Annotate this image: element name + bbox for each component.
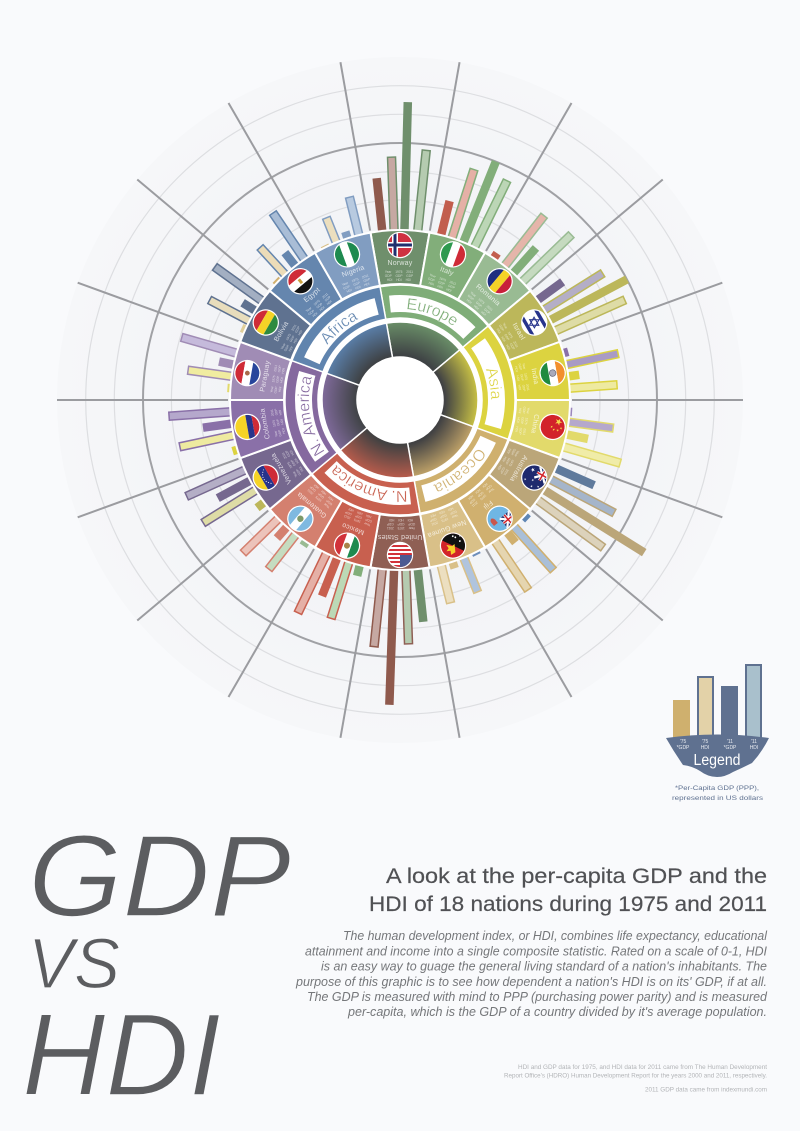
region: Asia: Asia xyxy=(486,369,502,400)
bars: Colombia xyxy=(169,408,241,455)
segment: Mexico: GDP GDP GDP xyxy=(345,510,373,524)
bars: Romania xyxy=(489,213,574,286)
description text: purpose of this graphic is to see how dependent a nation's HDI is on its' GDP, if at all. xyxy=(295,975,767,989)
country: Australia xyxy=(484,432,646,556)
segment: Romania: Romania xyxy=(474,283,501,308)
description text: per-capita, which is the GDP of a country divided by it's average population. xyxy=(347,1005,767,1019)
source notes: 2011 GDP data came from indexmundi.com xyxy=(645,1086,767,1094)
segment: Norway: GDP GDP GDP xyxy=(385,274,413,278)
region: Asia xyxy=(433,326,514,438)
legend: Legend xyxy=(694,752,740,769)
segment: United States: HDI HDI HDI xyxy=(389,518,413,522)
segment: Venezuela: HDI HDI HDI xyxy=(289,449,304,472)
country: New Guinea xyxy=(421,500,486,605)
bars: Guatemala xyxy=(240,514,311,572)
segment: Bolivia: HDI HDI HDI xyxy=(288,329,303,352)
flag: New Guinea xyxy=(441,534,465,558)
region: Europe: Europe xyxy=(407,298,457,325)
region: N. America (purple) xyxy=(286,362,367,474)
segment: Israel: Year 1975 2011 xyxy=(502,322,519,349)
country: Nigeria xyxy=(314,196,389,303)
segment: Mexico: HDI HDI HDI xyxy=(348,507,372,519)
bars: Egypt xyxy=(257,211,309,286)
flag: Paraguay xyxy=(233,359,261,387)
segment: Guatemala: GDP GDP GDP xyxy=(309,485,333,506)
segment: Norway: Norway xyxy=(388,260,413,267)
description text xyxy=(295,929,768,1019)
country: United States xyxy=(370,514,430,705)
segment: Fiji: Year 1975 2011 xyxy=(471,487,495,508)
segment: India xyxy=(510,341,571,399)
segment: Paraguay xyxy=(227,341,293,409)
flag: Italy xyxy=(441,242,465,266)
segment: Mexico: Mexico xyxy=(341,521,365,536)
bars: Mexico xyxy=(294,550,364,620)
segment: Mexico: Year 1975 2011 xyxy=(343,514,371,527)
description text: attainment and income into a single composite statistic. Rated on a scale of 0-1, HDI xyxy=(305,944,767,958)
segment: Colombia xyxy=(227,391,293,459)
flag: United States xyxy=(388,543,412,567)
source notes: HDI and GDP data for 1975, and HDI data for 2011 came from The Human Development xyxy=(518,1064,767,1071)
legend xyxy=(666,665,769,802)
subtitle: HDI of 18 nations during 1975 and 2011 xyxy=(369,893,767,916)
flag: India xyxy=(540,361,565,385)
flag: Bolivia xyxy=(249,306,282,339)
segment: Bolivia: GDP GDP GDP xyxy=(283,326,301,352)
description text: The human development index, or HDI, combines life expectancy, educational xyxy=(343,929,768,943)
segment: Egypt: GDP GDP GDP xyxy=(307,295,332,316)
country: Paraguay xyxy=(181,334,293,409)
country: Venezuela xyxy=(184,440,311,528)
segment: Paraguay: GDP GDP GDP xyxy=(273,365,282,394)
legend: represented in US dollars xyxy=(672,795,764,802)
segment: Nigeria: GDP GDP GDP xyxy=(343,277,371,291)
segment: United States: GDP GDP GDP xyxy=(387,522,415,526)
segment: Paraguay: Year 1975 2011 xyxy=(269,364,278,393)
segment: Israel: HDI HDI HDI xyxy=(496,328,511,351)
segment: Nigeria xyxy=(314,230,389,303)
region: Africa xyxy=(292,287,394,386)
country: India xyxy=(510,341,620,399)
legend: '75 xyxy=(702,739,708,745)
segment: Egypt: Year 1975 2011 xyxy=(305,292,329,313)
subtitle xyxy=(369,865,767,916)
segment: Guatemala: Year 1975 2011 xyxy=(306,488,331,509)
segment: United States xyxy=(370,514,430,570)
segment: New Guinea: New Guinea xyxy=(426,518,467,538)
segment: Romania xyxy=(458,252,530,324)
country: Italy xyxy=(411,160,511,303)
segment: Australia: HDI HDI HDI xyxy=(497,448,512,471)
legend: *Per-Capita GDP (PPP), xyxy=(675,785,759,792)
region: N. America (purple): N. America xyxy=(298,376,324,456)
segment: Colombia: HDI HDI HDI xyxy=(278,409,286,434)
bars: New Guinea xyxy=(437,549,481,604)
segment: Guatemala: HDI HDI HDI xyxy=(313,483,334,502)
segment: Australia: Australia xyxy=(508,454,529,483)
segment: China: China xyxy=(529,414,540,434)
segment: China: GDP GDP GDP xyxy=(518,406,527,435)
segment: Australia: GDP GDP GDP xyxy=(499,448,517,474)
description text: is an easy way to guage the general living standard of a nation's inhabitants. The xyxy=(321,960,767,974)
bars: Venezuela xyxy=(185,465,268,526)
main title: GDP xyxy=(28,811,291,941)
region: Africa: Africa xyxy=(322,313,358,344)
legend: '11 xyxy=(751,739,757,745)
segment: Paraguay: Paraguay xyxy=(259,360,272,392)
segment: China: Year 1975 2011 xyxy=(522,407,531,436)
region: N. America (red): N. America xyxy=(332,465,406,502)
country: China xyxy=(510,401,622,468)
region: Europe xyxy=(381,286,487,372)
segment: China: HDI HDI HDI xyxy=(514,408,522,432)
segment: Venezuela: Year 1975 2011 xyxy=(281,451,298,478)
segment: Romania: HDI HDI HDI xyxy=(466,298,487,317)
main title: HDI xyxy=(22,989,221,1120)
segment: Italy: HDI HDI HDI xyxy=(428,281,452,293)
segment: Guatemala: Guatemala xyxy=(296,490,328,519)
legend: HDI xyxy=(701,745,709,751)
white hub backing xyxy=(284,284,516,516)
legend: '75 xyxy=(680,739,686,745)
segment: Paraguay: HDI HDI HDI xyxy=(278,368,286,392)
country: Egypt xyxy=(257,211,349,331)
segment: Norway: Year 1975 2011 xyxy=(385,270,413,274)
segment: Bolivia xyxy=(238,289,316,368)
segment: Egypt: HDI HDI HDI xyxy=(312,299,333,318)
country: Colombia xyxy=(168,401,290,459)
segment: Italy: GDP GDP GDP xyxy=(427,276,455,290)
segment: Israel: GDP GDP GDP xyxy=(498,324,516,350)
segment: United States: Year 1975 2011 xyxy=(387,526,415,530)
bars: Australia xyxy=(534,464,646,556)
source notes xyxy=(504,1064,767,1094)
segment: New Guinea: Year 1975 2011 xyxy=(431,513,459,527)
segment: Italy xyxy=(419,232,484,299)
bars: United States xyxy=(370,567,428,705)
bars: Israel xyxy=(533,270,629,335)
country: Guatemala xyxy=(240,476,342,573)
flag: Colombia xyxy=(233,413,261,441)
flag: China xyxy=(540,414,565,439)
segment: Nigeria: Nigeria xyxy=(341,264,366,279)
flag: Guatemala xyxy=(288,506,312,531)
description text: The GDP is measured with mind to PPP (purchasing power parity) and is measured xyxy=(307,990,768,1004)
segment: Israel xyxy=(489,290,560,359)
main title xyxy=(22,811,291,1120)
flag: Australia xyxy=(522,466,546,490)
flag: Mexico xyxy=(335,534,359,558)
region: Oceania: Oceania xyxy=(433,450,485,492)
flag: Egypt xyxy=(283,264,317,298)
segment: Venezuela xyxy=(240,440,311,510)
segment: India: Year 1975 2011 xyxy=(521,363,530,391)
source notes: Report Office's (HDRO) Human Development Report for the years 2000 and 2011, respectively. xyxy=(504,1072,767,1080)
segment: China xyxy=(510,401,571,458)
segment: Romania: Year 1975 2011 xyxy=(469,291,494,312)
segment: Egypt: Egypt xyxy=(303,287,322,304)
segment: Nigeria: Year 1975 2011 xyxy=(341,273,369,287)
bars: China xyxy=(560,407,621,467)
segment: India: India xyxy=(530,368,539,385)
flag: Romania xyxy=(488,269,512,294)
bars: Bolivia xyxy=(208,264,266,334)
segment: Colombia: Colombia xyxy=(259,408,272,440)
segment: Colombia: Year 1975 2011 xyxy=(270,409,279,437)
segment: Norway xyxy=(370,230,430,286)
segment: Fiji xyxy=(459,474,530,548)
bars: Italy xyxy=(437,160,511,251)
segment: Fiji: HDI HDI HDI xyxy=(467,482,488,501)
segment: New Guinea: GDP GDP GDP xyxy=(429,509,457,523)
segment: Colombia: GDP GDP GDP xyxy=(274,408,282,437)
segment: New Guinea: HDI HDI HDI xyxy=(430,506,454,518)
flag: Norway xyxy=(388,233,412,257)
segment: Bolivia: Bolivia xyxy=(273,320,290,343)
center hole xyxy=(357,357,443,443)
bars: Paraguay xyxy=(181,334,240,393)
segment: Egypt xyxy=(268,251,349,331)
region: Oceania xyxy=(408,414,508,512)
segment: Venezuela: Venezuela xyxy=(270,452,293,485)
segment: Guatemala xyxy=(270,476,342,548)
legend: *GDP xyxy=(677,745,690,751)
subtitle: A look at the per-capita GDP and the xyxy=(386,865,767,888)
segment: Australia xyxy=(490,439,560,509)
flag: Israel xyxy=(522,310,546,334)
segment: Italy: Italy xyxy=(439,266,455,277)
legend: '11 xyxy=(727,739,733,745)
bars: Nigeria xyxy=(321,196,363,251)
segment: Bolivia: Year 1975 2011 xyxy=(280,323,298,350)
country: Norway xyxy=(370,102,430,286)
bars: India xyxy=(560,348,619,392)
country: Mexico xyxy=(294,497,389,620)
segment: Israel: Israel xyxy=(511,322,526,342)
legend: *GDP xyxy=(724,745,737,751)
country: Bolivia xyxy=(208,264,316,368)
segment: Norway: HDI HDI HDI xyxy=(387,278,411,282)
segment: United States: United States xyxy=(377,533,422,540)
segment: Fiji: Fiji xyxy=(482,499,494,511)
segment: Venezuela: GDP GDP GDP xyxy=(284,450,302,476)
segment: Italy: Year 1975 2011 xyxy=(429,273,457,286)
segment: New Guinea xyxy=(421,500,486,568)
flag: Fiji xyxy=(488,506,512,531)
radial grid xyxy=(57,57,743,743)
bars: Norway xyxy=(372,102,430,233)
segment: Mexico xyxy=(316,501,381,568)
segment: Nigeria: HDI HDI HDI xyxy=(346,282,370,294)
segment: Fiji: GDP GDP GDP xyxy=(468,484,493,505)
country: Israel xyxy=(489,268,629,359)
segment: India: GDP GDP GDP xyxy=(518,363,526,392)
country: Fiji xyxy=(451,469,556,592)
flag: Venezuela xyxy=(254,466,278,490)
segment: India: HDI HDI HDI xyxy=(514,366,522,391)
flag: Nigeria xyxy=(332,239,362,270)
country: Romania xyxy=(451,213,574,331)
segment: Romania: GDP GDP GDP xyxy=(467,294,491,315)
legend: HDI xyxy=(750,745,758,751)
bars: Fiji xyxy=(491,511,556,592)
region: N. America (red) xyxy=(313,428,420,514)
main title: VS xyxy=(28,925,120,1004)
segment: Australia: Year 1975 2011 xyxy=(502,450,520,477)
